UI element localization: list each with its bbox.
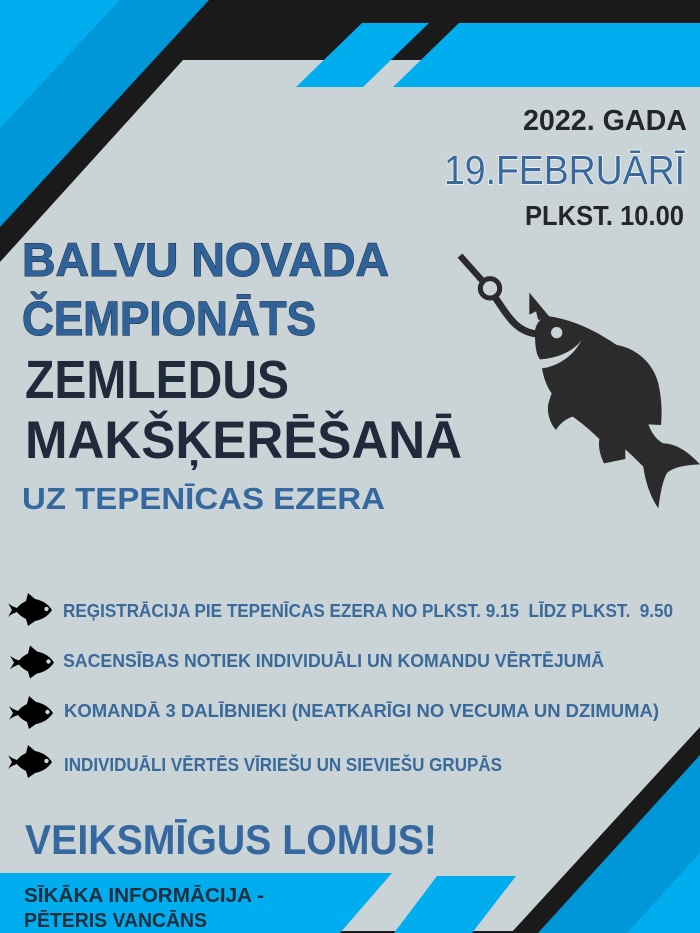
top left corner decoration [0,0,700,262]
hook [460,256,550,334]
bottom right corner decoration [340,727,700,933]
contact information [24,884,264,932]
bottom blue banner [0,873,392,933]
bullet fish 4 [8,745,52,778]
bottom blue parallelogram [394,876,516,933]
rule 4: INDIVIDUĀLI VĒRTĒS VĪRIEŠU UN SIEVIEŠU GRUPĀS [64,754,502,775]
location subtitle: UZ TEPENĪCAS EZERA [22,481,385,516]
rule 3: KOMANDĀ 3 DALĪBNIEKI (NEATKARĪGI NO VECUMA UN DZIMUMA) [64,700,659,721]
icon: fish on hook [460,256,700,508]
title line 4: MAKŠĶERĒŠANĀ [25,409,462,470]
top blue banner [393,23,700,87]
year heading: 2022. GADA [523,105,687,137]
contact information: SĪKĀKA INFORMĀCIJA - [24,884,264,907]
fish eye [551,327,562,338]
closing slogan: VEIKSMĪGUS LOMUS! [25,816,437,863]
fish body [535,316,700,508]
rule 2: SACENSĪBAS NOTIEK INDIVIDUĀLI UN KOMANDU VĒRTĒJUMĀ [63,650,604,671]
title line 1: BALVU NOVADA [22,233,389,286]
title line 3: ZEMLEDUS [25,350,289,410]
bullet fish 3 [9,696,53,729]
time heading: PLKST. 10.00 [525,200,684,231]
contact information: PĒTERIS VANCĀNS [24,909,207,932]
bullet fish 2 [10,646,54,678]
title line 2: ČEMPIONĀTS [22,291,316,346]
bullet fish 1 [8,593,52,626]
top blue parallelogram [296,23,429,87]
list of rules [8,593,673,778]
